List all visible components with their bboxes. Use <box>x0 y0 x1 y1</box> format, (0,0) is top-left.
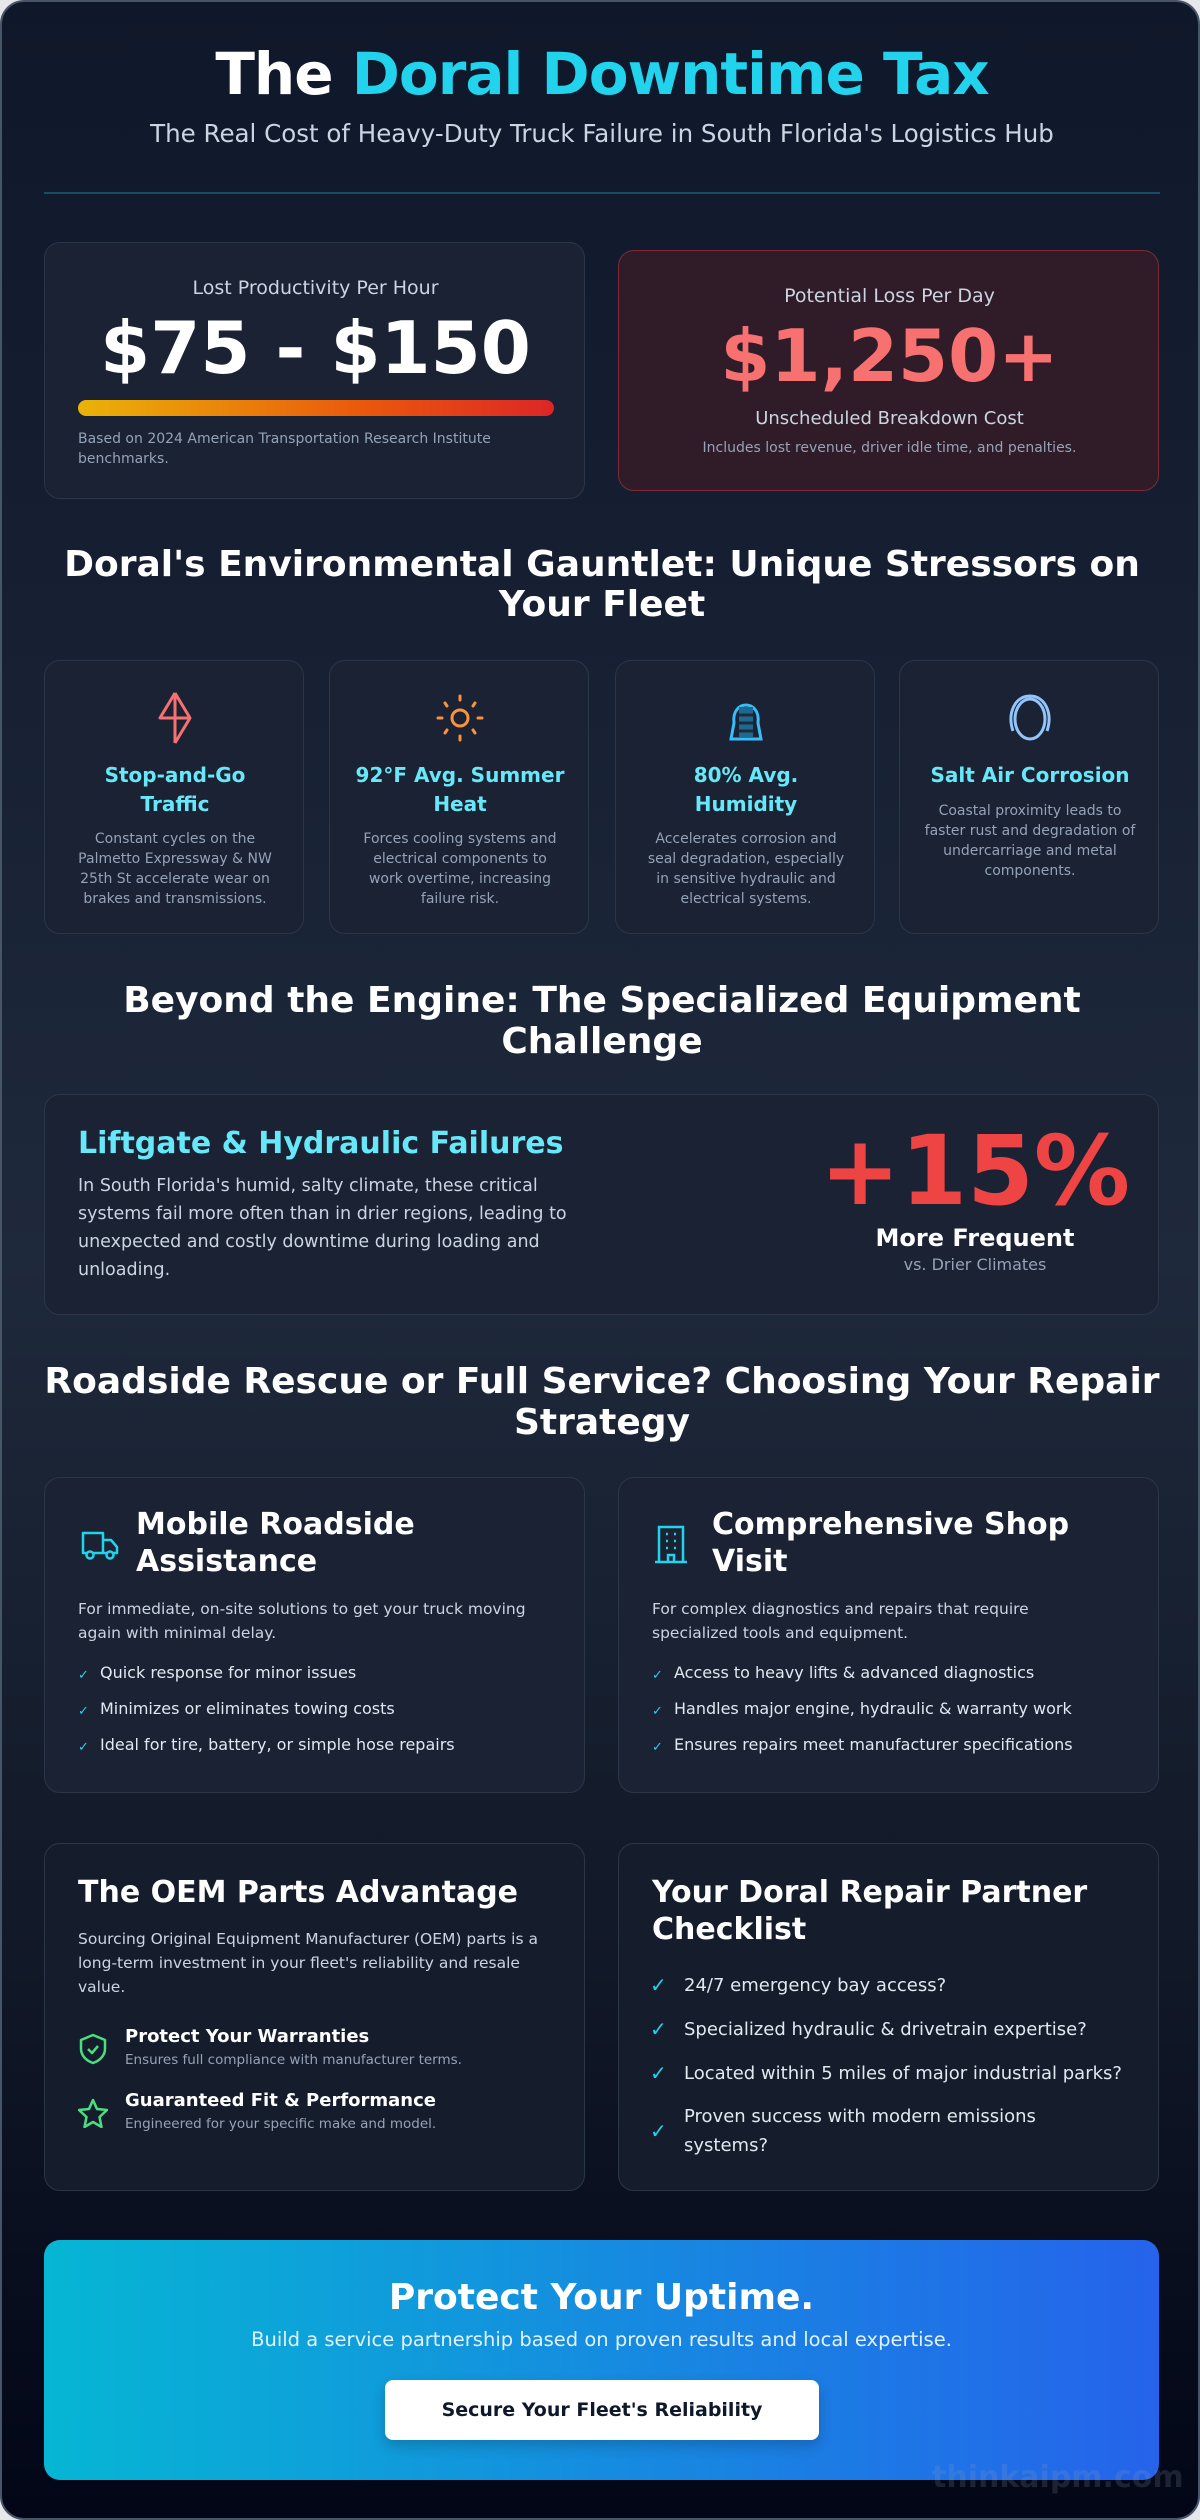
heading: specialized equipment: Beyond the Engine: The Specialized Equipment Challenge <box>123 980 1081 1062</box>
subtitle: The Real Cost of Heavy-Duty Truck Failure in South Florida's Logistics Hub <box>150 119 1054 148</box>
CTA subtitle: Build a service partnership based on proven results and local expertise. <box>251 2328 952 2351</box>
description: Constant cycles on the Palmetto Expressway & NW 25th St accelerate wear on brakes and transmissions. <box>78 831 272 907</box>
big number: $75 - $150 <box>100 306 531 390</box>
panel: OEM parts <box>44 1843 585 2191</box>
title: Stop-and-Go Traffic <box>105 763 245 816</box>
title <box>712 1507 1069 1579</box>
description: Sourcing Original Equipment Manufacturer (OEM) parts is a long-term investment in your fleet's reliability and resale value. <box>78 1930 538 1996</box>
panel: lost productivity <box>44 242 585 499</box>
icon: truck <box>82 1532 118 1560</box>
checklist: Access to heavy lifts & advanced diagnostics <box>674 1663 1034 1682</box>
title <box>652 1875 1088 1947</box>
checklist items: ✓ <box>650 2119 667 2143</box>
description: Accelerates corrosion and seal degradation, especially in sensitive hydraulic and electrical systems. <box>648 831 844 907</box>
title: Comprehensive Shop <box>712 1507 1069 1542</box>
checklist items: ✓ <box>650 1973 667 1997</box>
checklist: Ideal for tire, battery, or simple hose repairs <box>100 1735 455 1754</box>
title: Salt Air Corrosion <box>930 763 1130 787</box>
checklist items <box>650 1973 1122 2156</box>
title: The OEM Parts Advantage <box>78 1875 518 1910</box>
checklist items: Proven success with modern emissions systems? <box>684 2106 1036 2156</box>
label: Lost Productivity Per Hour <box>192 277 439 299</box>
panel: potential loss <box>618 250 1159 491</box>
description: Coastal proximity leads to faster rust and degradation of undercarriage and metal components. <box>925 803 1135 879</box>
title: Assistance <box>136 1544 317 1579</box>
icon: building <box>655 1526 687 1564</box>
heading: gauntlet: Doral's Environmental Gauntlet: Unique Stressors on Your Fleet <box>64 544 1140 625</box>
subtitle: Unscheduled Breakdown Cost <box>755 408 1024 429</box>
label: Potential Loss Per Day <box>784 285 995 307</box>
checklist items: Specialized hydraulic & drivetrain expertise? <box>684 2019 1087 2040</box>
panel: partner checklist <box>618 1843 1159 2191</box>
CTA button: Secure Your Fleet's Reliability <box>442 2399 762 2421</box>
stat: vs. Drier Climates <box>904 1255 1046 1274</box>
title <box>136 1507 415 1579</box>
benefit: fit: Engineered for your specific make and model. <box>125 2116 436 2132</box>
panel: liftgate <box>44 1094 1159 1315</box>
checklist: Ensures repairs meet manufacturer specifications <box>674 1735 1073 1754</box>
icon: traffic <box>158 692 192 744</box>
stat: More Frequent <box>876 1224 1074 1252</box>
description: For immediate, on-site solutions to get your truck moving again with minimal delay. <box>78 1600 526 1642</box>
checklist items: ✓ <box>650 2061 667 2085</box>
icon: salt air <box>1009 694 1051 740</box>
benefit: fit <box>125 2090 436 2132</box>
panel: salt air <box>899 660 1159 934</box>
CTA title: Protect Your Uptime. <box>389 2277 814 2318</box>
title: Checklist <box>652 1912 806 1947</box>
panel: mobile roadside <box>44 1477 585 1793</box>
note: Based on 2024 American Transportation Research Institute benchmarks. <box>78 431 491 467</box>
checklist items: Located within 5 miles of major industrial parks? <box>684 2063 1122 2084</box>
benefit: fit: Guaranteed Fit & Performance <box>125 2090 436 2111</box>
paragraph: In South Florida's humid, salty climate, these critical systems fail more often than in drier regions, leading to unexpected and costly downtime during loading and unloading. <box>78 1176 567 1280</box>
checklist: Handles major engine, hydraulic & warranty work <box>674 1699 1072 1718</box>
CTA button <box>385 2380 819 2440</box>
title: Your Doral Repair Partner <box>652 1875 1087 1910</box>
stat: +15% <box>820 1115 1130 1227</box>
panel: stop and go <box>44 660 304 934</box>
note: Includes lost revenue, driver idle time, and penalties. <box>703 440 1076 456</box>
title: 80% Avg. Humidity <box>694 763 798 816</box>
icon: star <box>78 2098 108 2128</box>
panel: shop visit <box>618 1477 1159 1793</box>
icon: humidity <box>729 704 763 740</box>
title: Liftgate & Hydraulic Failures <box>78 1126 563 1161</box>
description: For complex diagnostics and repairs that require specialized tools and equipment. <box>652 1600 1029 1642</box>
checklist: Minimizes or eliminates towing costs <box>100 1699 395 1718</box>
title: 92°F Avg. Summer Heat <box>356 763 564 816</box>
heading: repair strategy: Roadside Rescue or Full Service? Choosing Your Repair Strategy <box>44 1361 1160 1443</box>
checklist: Quick response for minor issues <box>100 1663 356 1682</box>
checklist <box>80 1663 455 1754</box>
checklist <box>654 1663 1073 1754</box>
icon: shield <box>80 2034 106 2064</box>
panel: humidity <box>615 660 875 934</box>
description: Forces cooling systems and electrical components to work overtime, increasing failure risk. <box>363 831 557 907</box>
panel: heat <box>329 660 589 934</box>
benefit: warranties: Protect Your Warranties <box>125 2026 369 2047</box>
benefit: warranties: Ensures full compliance with manufacturer terms. <box>125 2052 462 2068</box>
checklist items: ✓ <box>650 2017 667 2041</box>
big number: $1,250+ <box>720 314 1059 398</box>
benefit: warranties <box>125 2026 462 2068</box>
CTA banner <box>44 2240 1159 2480</box>
gradient bar <box>78 400 554 416</box>
title: Mobile Roadside <box>136 1507 415 1542</box>
title: Visit <box>712 1544 787 1579</box>
title: The Doral Downtime Tax <box>215 40 989 108</box>
icon: sun <box>436 694 484 742</box>
watermark: thinkaipm.com <box>932 2460 1184 2495</box>
checklist items: 24/7 emergency bay access? <box>684 1975 946 1996</box>
